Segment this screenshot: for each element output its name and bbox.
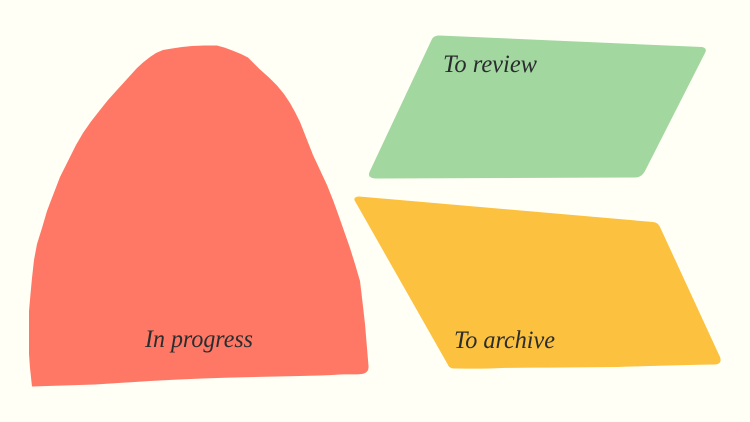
label: To archive: To archive: [454, 327, 555, 354]
red dome shape: [29, 46, 369, 386]
green parallelogram: [369, 36, 706, 178]
panel: to review: [369, 36, 706, 178]
yellow parallelogram: [354, 196, 721, 369]
label: To review: To review: [443, 51, 537, 78]
panel: to archive: [354, 196, 721, 369]
label: In progress: In progress: [144, 326, 253, 353]
